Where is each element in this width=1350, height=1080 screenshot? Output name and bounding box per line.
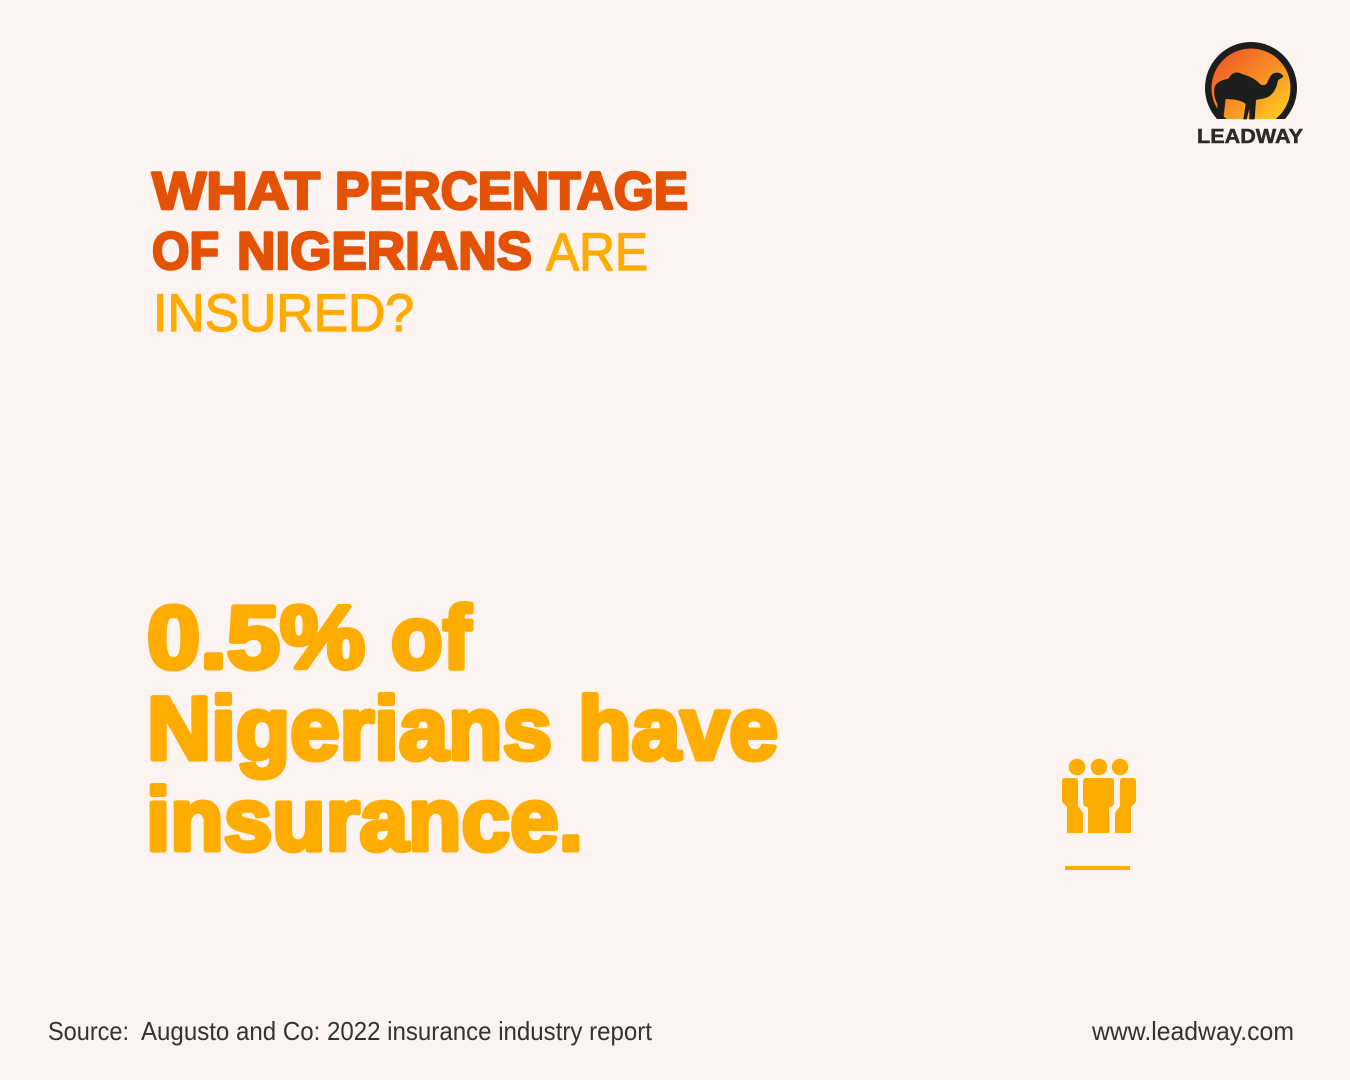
logo emblem: camel in sun xyxy=(1205,42,1297,120)
source note: Source: xyxy=(48,1016,129,1046)
logo: Leadway xyxy=(1197,42,1304,148)
website url: www.leadway.com xyxy=(1091,1016,1294,1046)
title: WHAT xyxy=(152,162,320,221)
title: INSURED? xyxy=(153,284,414,343)
main statement: Nigerians xyxy=(147,678,552,778)
logo wordmark: LEADWAY xyxy=(1197,126,1304,148)
title: ARE xyxy=(546,223,648,282)
main statement: have xyxy=(578,678,778,778)
main statement: insurance. xyxy=(146,769,583,869)
title xyxy=(152,162,688,343)
underline below icon xyxy=(1065,866,1130,870)
main statement xyxy=(146,587,778,869)
main statement: of xyxy=(391,587,471,687)
source note: Augusto and Co: 2022 insurance industry report xyxy=(141,1016,653,1046)
title: NIGERIANS xyxy=(237,222,532,281)
icon: group of three people xyxy=(1062,759,1136,833)
title: OF xyxy=(152,222,219,281)
title: PERCENTAGE xyxy=(335,162,688,221)
main statement: 0.5% xyxy=(147,587,365,687)
